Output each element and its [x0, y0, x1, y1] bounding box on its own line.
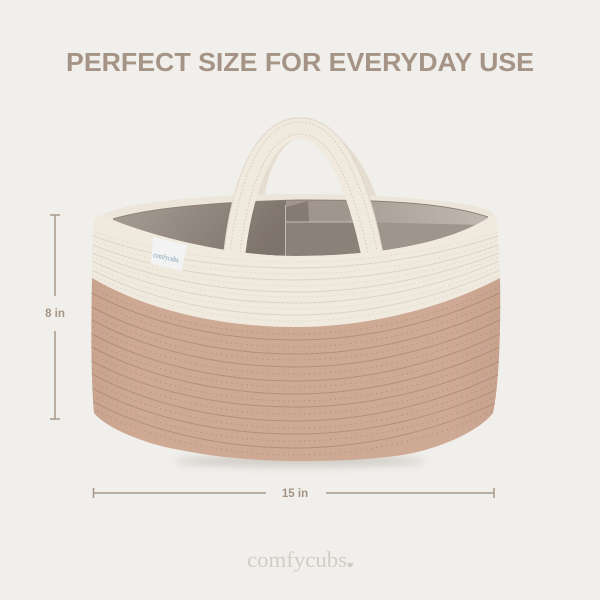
- back handle: [257, 130, 370, 205]
- handle body: [234, 128, 373, 258]
- logo heart: [347, 563, 353, 568]
- label text: comfycubs.: [153, 250, 181, 265]
- width label: 15 in: [282, 488, 308, 500]
- pink rope body: [91, 278, 500, 461]
- handle stitching: [230, 122, 378, 254]
- right lower panel: [350, 222, 476, 254]
- brand logo: [247, 547, 353, 572]
- label tag: [151, 237, 187, 271]
- interior top lip: [113, 200, 488, 219]
- back rim: [93, 194, 497, 256]
- handle edge highlight: [224, 118, 383, 254]
- infographic canvas: [46, 52, 533, 572]
- cream rope lines: [88, 234, 504, 315]
- centre divider panel: [286, 222, 360, 256]
- sewn label: [151, 237, 187, 271]
- title: PERFECT SIZE FOR EVERYDAY USE: [66, 47, 534, 77]
- logo wordmark: comfycubs: [247, 547, 347, 572]
- width line: [93, 488, 494, 498]
- pink rope stitches: [88, 285, 504, 455]
- pink rope seams: [88, 291, 504, 448]
- front handle: [224, 118, 383, 258]
- height dimension: [45, 215, 65, 419]
- divider edge: [285, 205, 354, 256]
- basket photo: [88, 118, 504, 467]
- height label: 8 in: [45, 308, 65, 320]
- cream rope band: [92, 215, 500, 327]
- pocket fold: [286, 201, 309, 222]
- width dimension: [93, 488, 494, 500]
- cream rope stitches: [88, 230, 504, 321]
- back compartment: [286, 200, 350, 222]
- right compartment: [370, 201, 488, 225]
- height line: [50, 215, 60, 419]
- body edge shading: [91, 278, 500, 461]
- fabric interior: [113, 200, 488, 256]
- left compartment: [113, 200, 287, 256]
- ground shadow: [175, 455, 425, 467]
